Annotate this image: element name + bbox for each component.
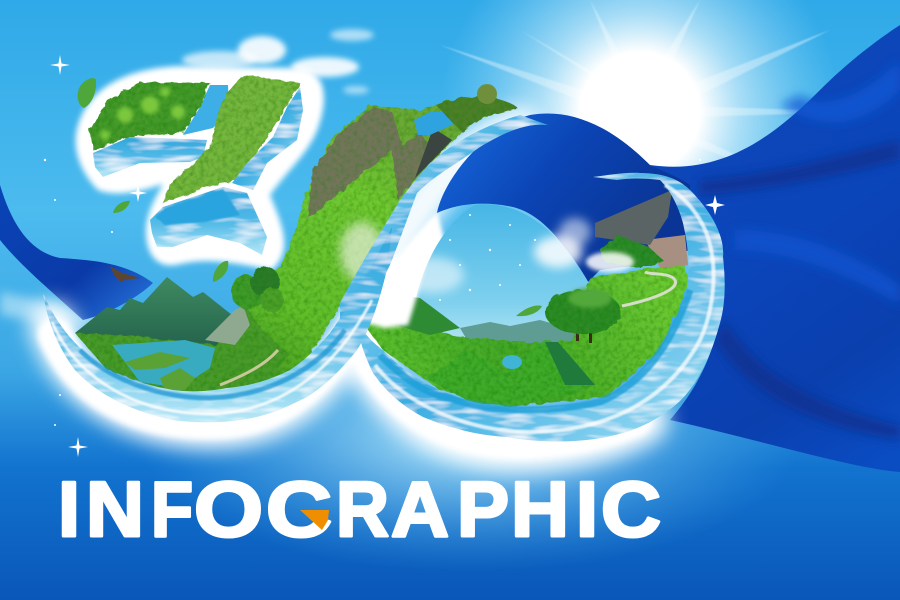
star dust <box>439 214 536 301</box>
title: INFOGRAPHIC: C <box>601 465 661 553</box>
right ring band <box>357 173 725 441</box>
lower water numeral stroke <box>150 187 267 255</box>
top bushes <box>436 97 518 132</box>
panel: rock outcrop <box>586 190 688 272</box>
lake <box>112 340 215 388</box>
ring interior white base <box>345 213 470 360</box>
forest water ledge <box>93 137 207 177</box>
green bushes <box>600 235 665 268</box>
white mist <box>586 252 634 272</box>
panel: left lake landscape <box>75 267 290 392</box>
grass ribbon <box>162 75 300 203</box>
left arc band <box>43 227 392 422</box>
sky disc <box>410 204 620 345</box>
title: INFOGRAPHIC <box>58 465 661 553</box>
ring highlight <box>375 185 714 432</box>
panel: inner ring scene <box>357 204 688 407</box>
rocky ridge <box>308 107 432 218</box>
icon: orange triangle in G <box>300 510 329 530</box>
clouds <box>182 29 374 94</box>
sky clouds <box>400 218 591 293</box>
sun rays <box>440 0 870 185</box>
winding path <box>622 272 676 306</box>
sun glow <box>440 0 840 312</box>
arc deep water <box>80 330 345 398</box>
title: INFOGRAPHIC: A <box>391 465 449 553</box>
lower water top shade <box>155 189 240 225</box>
panel: left blue cloth <box>0 185 153 320</box>
back mountains <box>75 277 240 360</box>
trees <box>231 267 284 312</box>
forest highlights <box>100 87 185 140</box>
panel: giant green hillside <box>215 84 518 390</box>
foreground peaks <box>425 340 595 405</box>
mist <box>340 222 384 282</box>
ring deep water <box>380 290 690 410</box>
distant range <box>460 320 575 345</box>
ridge shadow <box>415 128 452 178</box>
icons: leaves <box>78 78 542 316</box>
title: INFOGRAPHIC: P <box>457 465 509 553</box>
white sweep <box>362 213 437 328</box>
near ground <box>75 305 290 392</box>
lake islands <box>125 352 195 390</box>
top river <box>414 110 470 135</box>
title: INFOGRAPHIC: R <box>336 465 389 553</box>
cloth body <box>650 25 900 472</box>
small left hill <box>385 296 460 335</box>
title: INFOGRAPHIC: O <box>194 465 263 553</box>
title: INFOGRAPHIC: N <box>86 465 144 553</box>
panel: blue cloth arch <box>437 113 690 285</box>
title: INFOGRAPHIC: I <box>576 465 598 553</box>
brown boulders <box>645 235 688 268</box>
lower light glow <box>0 250 900 600</box>
hill slope <box>215 100 515 390</box>
arc highlight <box>52 300 372 414</box>
halo core <box>55 270 635 442</box>
icons: sparkles <box>44 55 725 457</box>
cloth folds <box>700 60 900 440</box>
panel: right blue cloth <box>650 25 900 472</box>
waterfall ribbon <box>232 87 303 190</box>
title: INFOGRAPHIC: I <box>58 465 80 553</box>
rocky near peak <box>205 305 250 345</box>
oak tree <box>545 288 621 343</box>
peak shade <box>545 342 595 385</box>
small pond <box>502 355 522 369</box>
white halo: infinity <box>52 130 645 448</box>
icon: eagle <box>110 266 140 282</box>
halo outer blur <box>52 130 645 448</box>
title: INFOGRAPHIC: H <box>511 465 569 553</box>
grey slab <box>595 190 672 245</box>
dirt path <box>220 350 278 385</box>
left ascending band <box>340 115 548 332</box>
green field <box>357 263 688 407</box>
forest island <box>90 82 210 150</box>
left light streak <box>0 292 180 345</box>
panel: floating numeral landscape <box>90 75 303 255</box>
top tree <box>477 84 497 104</box>
white halo: floating numeral <box>76 66 324 270</box>
river <box>183 85 229 135</box>
panel: water ring <box>43 115 725 442</box>
title: INFOGRAPHIC: C <box>266 465 332 553</box>
title: INFOGRAPHIC: F <box>151 465 193 553</box>
